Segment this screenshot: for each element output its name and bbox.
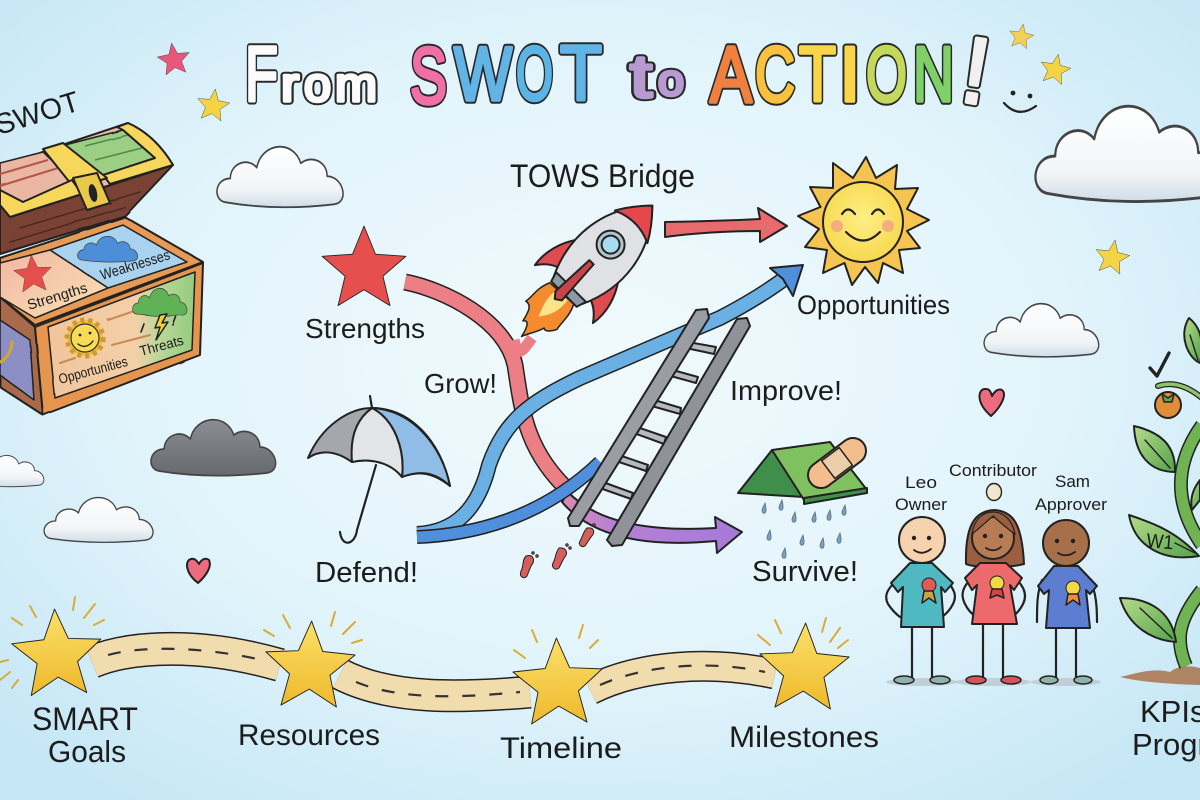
road labels: Goals: [48, 734, 126, 769]
growing plant: KPIs progress: [1120, 318, 1200, 685]
person: Contributor: [955, 510, 1031, 686]
title: [245, 17, 997, 125]
soil: [1120, 666, 1200, 685]
team labels: Owner: [895, 495, 947, 514]
chest box top face: [0, 217, 203, 325]
hearts: [187, 389, 1004, 583]
title: O: [866, 30, 907, 118]
middle labels: Improve!: [730, 375, 842, 406]
road labels: SMART: [32, 701, 138, 737]
small sun: [67, 320, 103, 356]
small storm cloud: [133, 288, 187, 340]
red star: strengths: [322, 226, 406, 306]
umbrella: defend: [308, 396, 450, 543]
middle labels: Grow!: [424, 368, 497, 399]
fins: [534, 231, 584, 281]
title: N: [913, 30, 954, 118]
treasure chest: SWOT: [0, 123, 203, 415]
team labels: [895, 461, 1107, 514]
title: o: [304, 59, 331, 112]
title: m: [335, 59, 377, 112]
title: t: [630, 43, 652, 110]
red arrow to sun: [665, 208, 787, 242]
flame: [506, 279, 578, 351]
sun: opportunities: [798, 157, 929, 285]
smiley face: [1004, 91, 1036, 112]
title: O: [516, 32, 553, 117]
title: C: [755, 30, 795, 118]
team labels: Leo: [905, 473, 937, 492]
rocket: [492, 176, 682, 366]
middle labels: Defend!: [315, 557, 418, 589]
road labels: [32, 701, 879, 769]
title: A: [710, 30, 753, 119]
chest labels: Strengths: [25, 280, 89, 314]
leaky roof with bandage: survive: [738, 433, 871, 558]
chest labels: Weaknesses: [98, 247, 172, 284]
check mark: [1150, 353, 1169, 376]
chest labels: Opportunities: [57, 353, 129, 387]
title: o: [658, 56, 684, 105]
footprints: [520, 524, 595, 578]
middle labels: Opportunities: [797, 290, 950, 320]
body: [547, 184, 674, 311]
middle labels: Survive!: [752, 556, 858, 588]
chest lid interior: [0, 165, 173, 254]
milestone stars: [0, 597, 850, 725]
chest lid top: [0, 123, 173, 217]
team labels: Sam: [1055, 472, 1090, 491]
middle labels: [305, 158, 950, 589]
title: o: [304, 59, 331, 112]
middle labels: Strengths: [305, 313, 425, 344]
flow arrows: [405, 208, 803, 553]
stem: [1180, 425, 1200, 666]
title: W: [454, 32, 512, 117]
title: m: [335, 59, 377, 112]
red strengths path: [405, 282, 570, 492]
title: T: [799, 30, 836, 118]
title: A: [710, 30, 753, 119]
plant labels: W1: [1146, 530, 1174, 554]
title: S: [410, 31, 447, 120]
middle labels: TOWS Bridge: [510, 158, 695, 194]
decorative stars near title: [156, 22, 1132, 275]
contributor token: [986, 484, 1002, 500]
title: !: [955, 17, 997, 125]
road labels: Milestones: [729, 721, 879, 754]
title: F: [245, 30, 278, 118]
chest box front face: [35, 263, 203, 415]
title: N: [913, 30, 954, 118]
title: I: [839, 30, 861, 118]
title: F: [245, 30, 278, 118]
title: o: [658, 56, 684, 105]
title: r: [281, 59, 299, 112]
road timeline: [92, 649, 775, 696]
person: Leo, Owner: [886, 517, 958, 686]
title: T: [799, 30, 836, 118]
plant labels: [1132, 530, 1200, 762]
title: I: [839, 30, 861, 118]
title: t: [630, 43, 652, 110]
team labels: Contributor: [949, 461, 1037, 480]
title: r: [281, 59, 299, 112]
title: T: [560, 29, 602, 117]
title: T: [560, 29, 602, 117]
chest lock: [73, 173, 110, 210]
title: S: [410, 31, 447, 120]
blue growth arrow: [417, 279, 784, 534]
title: !: [955, 17, 997, 125]
chest box left face: [0, 297, 43, 415]
title: W: [454, 32, 512, 117]
title: C: [755, 30, 795, 118]
team labels: Approver: [1035, 495, 1107, 514]
title: O: [516, 32, 553, 117]
road labels: Timeline: [500, 732, 622, 765]
leaves: [1134, 426, 1175, 472]
chest labels: [0, 86, 185, 387]
ladder: [568, 309, 750, 546]
person: Sam, Approver: [1031, 520, 1101, 686]
fruit: [1155, 392, 1181, 418]
road labels: Resources: [238, 719, 380, 752]
clouds: [0, 106, 1200, 542]
blue defend arrow: [417, 462, 600, 537]
chest labels: Threats: [138, 332, 185, 359]
title: O: [866, 30, 907, 118]
purple survive arrow: [562, 492, 742, 553]
chest lid gold bands: [103, 123, 173, 184]
